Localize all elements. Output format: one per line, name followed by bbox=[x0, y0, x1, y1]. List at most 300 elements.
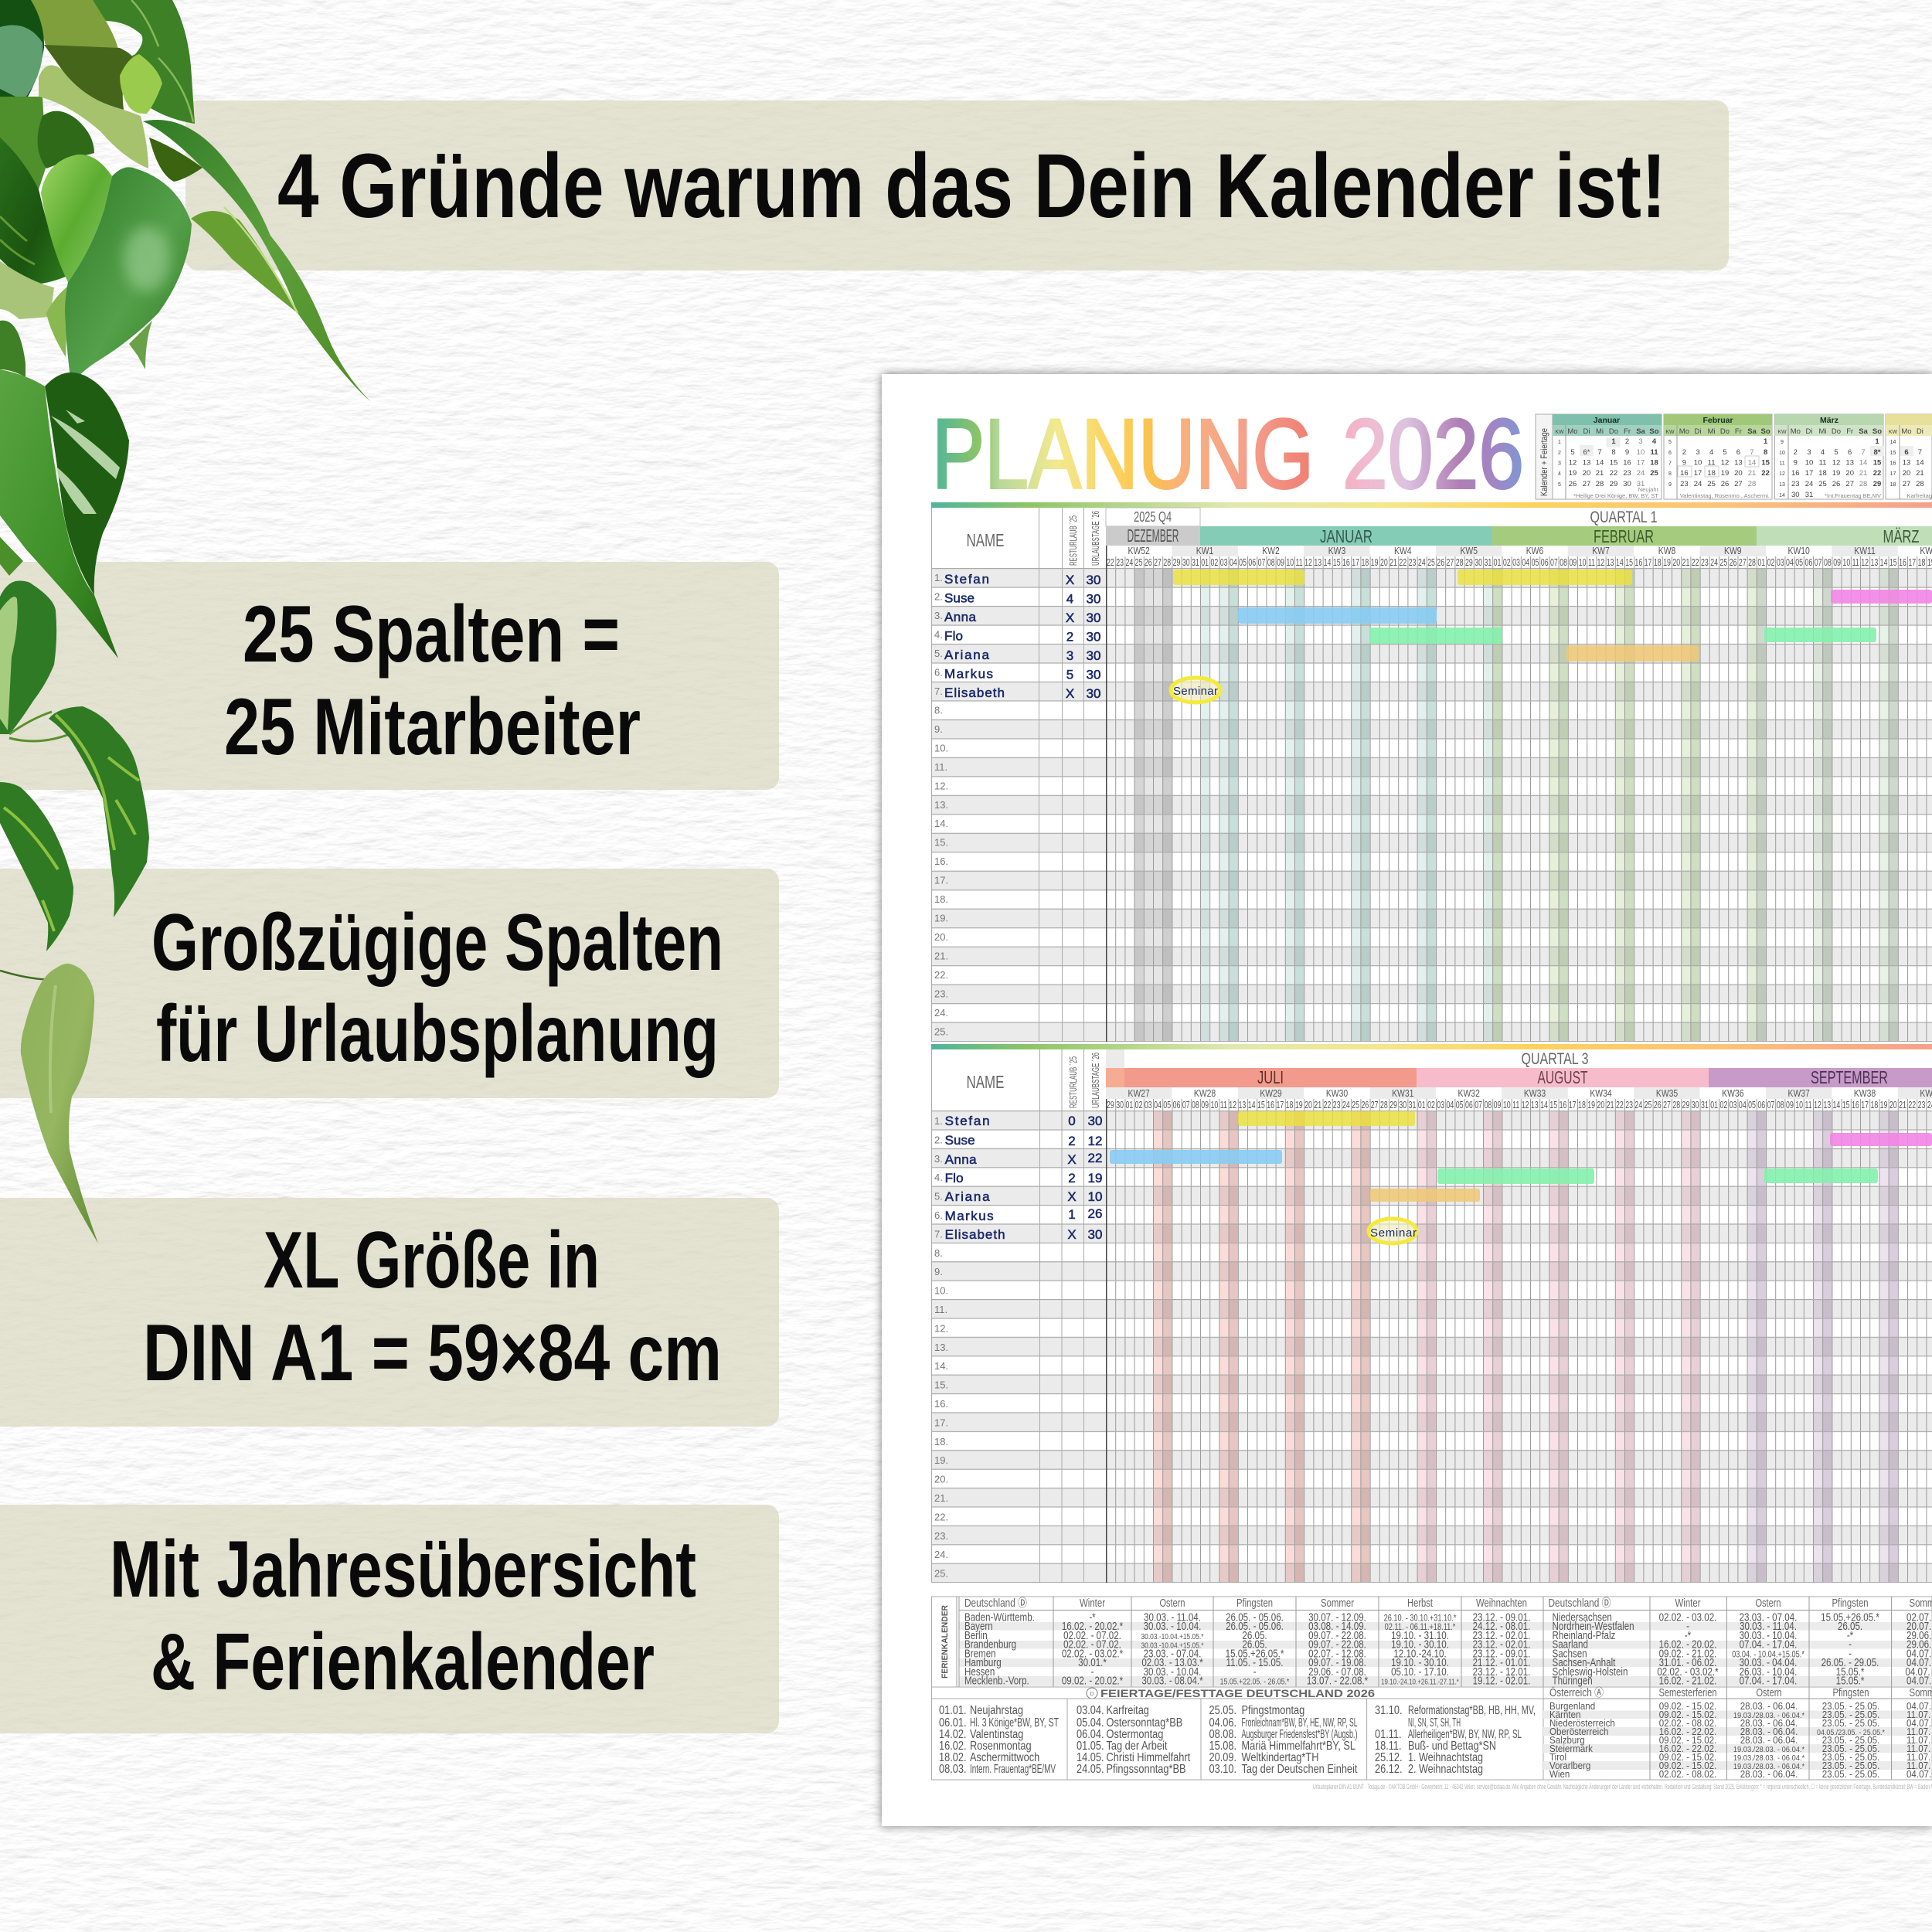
holidays column 1: Valentinstag bbox=[970, 1728, 1023, 1741]
pfingsten dates right: 15.05.+26.05.* bbox=[1821, 1611, 1879, 1624]
mini month: Februar: 26 bbox=[1721, 480, 1729, 488]
mini month: Februar: 25 bbox=[1707, 480, 1716, 488]
mini month: April: 20 bbox=[1903, 469, 1910, 478]
semester dates: 09.02. - 15.02. bbox=[1659, 1751, 1716, 1763]
header: calendar weeks Q1: KW4 bbox=[1394, 546, 1412, 556]
leave values Q3: 26 bbox=[1088, 1206, 1102, 1221]
column heads: Pfingsten bbox=[1833, 1686, 1869, 1699]
leaf: curved right bbox=[49, 706, 149, 917]
holidays column 4 bbox=[1375, 1704, 1536, 1776]
row numbers Q1: 18. bbox=[934, 893, 948, 905]
weihnachten dates: 19.12. - 02.01. bbox=[1473, 1674, 1530, 1687]
leaf: long narrow upper bbox=[143, 120, 371, 402]
pfingsten dates right: 15.05.* bbox=[1836, 1674, 1864, 1687]
leaf: dark green behind bbox=[0, 97, 46, 189]
mini month: März: 2 bbox=[1794, 448, 1798, 457]
header: calendar weeks Q1: KW1 bbox=[1196, 546, 1213, 556]
winter dates: 30.01.* bbox=[1078, 1656, 1107, 1668]
mini month: Januar: 2 bbox=[1558, 451, 1561, 456]
pfingsten dates: 23.05. - 25.05. bbox=[1822, 1743, 1879, 1754]
mini month: Februar: 18 bbox=[1707, 469, 1716, 478]
mini month: Januar: 23 bbox=[1623, 469, 1631, 478]
column heads: Semesterferien bbox=[1658, 1686, 1717, 1699]
mini month: Januar: 26 bbox=[1569, 480, 1577, 488]
holidays column 2: 01.05. bbox=[1077, 1740, 1104, 1753]
table frame and stripes bbox=[1543, 1687, 1932, 1780]
winter dates right: 31.01. - 06.02. bbox=[1659, 1656, 1716, 1668]
holidays column 1: 18.02. bbox=[939, 1751, 967, 1764]
pfingsten dates: 23.05. - 25.05. bbox=[1822, 1734, 1879, 1746]
sommer dates: 29.06. - 07.08. bbox=[1308, 1665, 1366, 1678]
row numbers Q3: 19. bbox=[934, 1454, 948, 1466]
leave values Q3: 19 bbox=[1088, 1171, 1102, 1185]
pfingsten dates: 26.05. bbox=[1242, 1629, 1267, 1641]
header: calendar weeks Q1: KW10 bbox=[1788, 546, 1810, 556]
mini month: März: 31 bbox=[1805, 491, 1813, 499]
mini month: März: 15 bbox=[1873, 459, 1882, 467]
mini month: März: 19 bbox=[1832, 469, 1840, 478]
sommer dates: 02.07. - 12.08. bbox=[1308, 1647, 1366, 1660]
mini month: März: 28 bbox=[1859, 480, 1867, 488]
mini month: Februar: 7 bbox=[1750, 448, 1754, 457]
row numbers Q1: 5. bbox=[934, 648, 943, 659]
pfingsten dates right: - bbox=[1849, 1638, 1852, 1651]
mini month: März: KW bbox=[1777, 430, 1787, 435]
heading: Feiertage Deutschland: D bbox=[1090, 1692, 1094, 1697]
pfingsten dates right: 15.05.* bbox=[1836, 1665, 1864, 1678]
ostern dates: 28.03. - 06.04. bbox=[1740, 1734, 1798, 1746]
mini month: März: 21 bbox=[1859, 469, 1867, 478]
leave values Q3: 2 bbox=[1068, 1134, 1076, 1148]
states: Oberösterreich bbox=[1549, 1726, 1609, 1737]
mini month: März: 29 bbox=[1873, 480, 1881, 488]
pfingsten dates: 26.05. - 05.06. bbox=[1226, 1611, 1284, 1624]
leave values Q3: X bbox=[1067, 1189, 1077, 1204]
header: quarter row Q3 bbox=[1106, 1049, 1589, 1068]
ostern dates right: 03.04. - 10.04.+15.05.* bbox=[1732, 1651, 1804, 1660]
leaf: top back dark-green bbox=[93, 0, 195, 124]
mini month: Februar: 9 bbox=[1682, 459, 1686, 467]
holidays column 1: Rosenmontag bbox=[970, 1740, 1032, 1753]
mini month: Februar bbox=[1664, 414, 1772, 499]
highlight: long leaf midrib bbox=[224, 207, 298, 313]
weihnachten dates: 24.12. - 08.01. bbox=[1473, 1620, 1530, 1632]
leaf: big heart main bbox=[65, 167, 192, 385]
leave values Q1: X bbox=[1066, 686, 1074, 701]
mini month: März: 22 bbox=[1873, 469, 1881, 478]
states: Vorarlberg bbox=[1549, 1760, 1590, 1771]
row numbers Q1: 16. bbox=[934, 855, 948, 867]
leaf: top-left dark corner bbox=[0, 0, 44, 104]
handwritten names Q3: Suse bbox=[945, 1133, 975, 1148]
poster heading: PLANUNG 2026: PLANUNG bbox=[932, 399, 1314, 510]
handwritten names Q1: Suse bbox=[944, 590, 975, 606]
handwritten names Q3: Elisabeth bbox=[945, 1227, 1005, 1242]
ostern dates: 28.03. - 06.04. bbox=[1740, 1726, 1798, 1737]
ostern dates: 30.03. - 10.04. bbox=[1144, 1665, 1201, 1678]
leave values Q3: 1 bbox=[1068, 1207, 1076, 1222]
weihnachten dates: 23.12. - 02.01. bbox=[1473, 1629, 1530, 1641]
states column right: Sachsen bbox=[1552, 1647, 1587, 1660]
holidays column 1: Hl. 3 Könige*BW, BY, ST bbox=[970, 1716, 1059, 1730]
pfingsten dates: 15.05.+22.05. - 26.05.* bbox=[1220, 1678, 1289, 1687]
header: month bands Q3: JULI bbox=[1257, 1067, 1284, 1087]
states column left: Bremen bbox=[964, 1647, 996, 1660]
states column right: Saarland bbox=[1552, 1638, 1588, 1651]
poster heading: PLANUNG 2026: 2026 bbox=[1342, 399, 1524, 510]
states column left: Brandenburg bbox=[964, 1638, 1016, 1651]
mini month: April: 14 bbox=[1916, 459, 1924, 467]
header: calendar weeks Q3: KW35 bbox=[1656, 1088, 1679, 1099]
mini month: April: 21 bbox=[1916, 469, 1924, 478]
header: month bands Q1 bbox=[1106, 526, 1932, 546]
mini month: Februar: 28 bbox=[1748, 480, 1756, 488]
mini month: April: 7 bbox=[1918, 448, 1922, 457]
sommer dates: 09.07. - 22.08. bbox=[1308, 1638, 1366, 1651]
row shading Q3 bbox=[931, 1111, 1932, 1582]
panel: feature box 2 bbox=[0, 869, 779, 1098]
column headers Q3: URLAUBSTAGE ´26 bbox=[1090, 1053, 1101, 1108]
leave values Q1: 4 bbox=[1066, 592, 1073, 606]
states: Salzburg bbox=[1549, 1734, 1585, 1746]
mini month: März: März bbox=[1820, 416, 1838, 425]
mini month: März: 9 bbox=[1781, 440, 1784, 445]
winter dates right: 16.02. - 21.02. bbox=[1659, 1674, 1716, 1687]
header: month bands Q1: JANUAR bbox=[1320, 526, 1372, 546]
vacation bar: Stefan first bbox=[1173, 570, 1304, 585]
vacation bar: Flo 1 bbox=[1437, 1168, 1594, 1184]
row numbers Q3: 21. bbox=[934, 1492, 948, 1504]
row numbers Q3: 23. bbox=[934, 1530, 948, 1542]
handwritten names Q1: Stefan bbox=[944, 572, 989, 587]
mini month: Februar: 2 bbox=[1682, 448, 1686, 457]
winter dates: 09.02. - 20.02.* bbox=[1062, 1674, 1123, 1687]
mini month: März: 13 bbox=[1845, 459, 1854, 467]
column heads: Pfingsten bbox=[1236, 1597, 1273, 1610]
states: Burgenland bbox=[1549, 1700, 1595, 1712]
mini month: Januar: 17 bbox=[1637, 459, 1645, 467]
leaf: top-left variegated bbox=[0, 25, 43, 100]
mini month: März: Mi bbox=[1818, 427, 1827, 436]
holidays column 4: 26.12. bbox=[1375, 1763, 1403, 1776]
herbst dates: 26.10. - 30.10.+31.10.* bbox=[1384, 1614, 1456, 1624]
mini month: März: 9 bbox=[1794, 459, 1798, 467]
header: calendar weeks Q1: KW52 bbox=[1128, 546, 1150, 556]
holidays column 3: Augsburger Friedensfest*BY (Augsb.) bbox=[1241, 1728, 1357, 1741]
mini month: April: Mo bbox=[1901, 427, 1912, 436]
leaf: second heart left half bbox=[0, 369, 118, 658]
pfingsten dates: 23.05. - 25.05. bbox=[1822, 1768, 1879, 1780]
leave values Q3: 10 bbox=[1088, 1189, 1102, 1204]
text block: Großzügige Spalten: für Urlaubsplanung bbox=[156, 989, 719, 1079]
mini month: Februar: Valentinstag, Rosenmo., Aschermi. bbox=[1680, 492, 1770, 499]
poster: calendar planner bbox=[882, 374, 1932, 1826]
winter dates right: 02.02. - 03.02. bbox=[1659, 1611, 1716, 1624]
mini month: März: Mo bbox=[1791, 427, 1801, 436]
holidays column 3: Mariä Himmelfahrt*BY, SL bbox=[1241, 1740, 1355, 1753]
leaf stems: centre cluster bbox=[9, 712, 70, 741]
row numbers Q1: 6. bbox=[934, 666, 943, 678]
mini month: Januar: 7 bbox=[1597, 448, 1602, 457]
header: calendar weeks Q3: KW31 bbox=[1392, 1088, 1413, 1099]
states column left: Bayern bbox=[964, 1620, 993, 1632]
column heads: Winter bbox=[1675, 1597, 1700, 1610]
pfingsten dates right: -* bbox=[1847, 1629, 1853, 1641]
mini month: Januar: Neujahr bbox=[1638, 486, 1659, 493]
holidays column 1: Intern. Frauentag*BE/MV bbox=[970, 1763, 1056, 1776]
poster sheet bbox=[882, 374, 1932, 1826]
column headers Q1: RESTURLAUB ´25 bbox=[1067, 515, 1079, 566]
winter dates right: 09.02. - 21.02. bbox=[1659, 1647, 1716, 1660]
column heads: Ostern bbox=[1159, 1597, 1185, 1610]
holidays column 3: 20.09. bbox=[1209, 1751, 1236, 1764]
mini month: Februar: So bbox=[1761, 427, 1770, 436]
mini month: Januar: 1 bbox=[1611, 437, 1616, 446]
winter dates right: 16.02. - 20.02. bbox=[1659, 1638, 1716, 1651]
leave values Q1: 30 bbox=[1087, 592, 1100, 606]
highlight: second heart white bands bbox=[51, 410, 120, 514]
row numbers Q1: 3. bbox=[934, 610, 943, 621]
row numbers Q3: 13. bbox=[934, 1342, 948, 1353]
mini month: April: 14 bbox=[1890, 440, 1896, 445]
holidays column 4: Buß- und Bettag*SN bbox=[1408, 1740, 1496, 1753]
header: calendar weeks Q3: KW28 bbox=[1194, 1088, 1216, 1099]
leave values Q1: 30 bbox=[1087, 629, 1100, 644]
row numbers Q1: 15. bbox=[934, 837, 948, 849]
row numbers Q1: 1. bbox=[934, 572, 943, 583]
ostern dates: 02.03. - 13.03.* bbox=[1141, 1656, 1203, 1668]
mini month: Februar: Do bbox=[1720, 427, 1730, 436]
holidays column 2 bbox=[1077, 1704, 1190, 1776]
mini month: Februar: Sa bbox=[1747, 427, 1757, 436]
ostern dates: 23.03. - 07.04. bbox=[1144, 1647, 1201, 1660]
row numbers Q1: 8. bbox=[934, 704, 943, 716]
leaf: pale lower bbox=[21, 964, 98, 1243]
panel: title banner bbox=[185, 100, 1729, 270]
handwritten names Q1: Anna bbox=[944, 610, 977, 624]
holidays column 2: 24.05. bbox=[1077, 1763, 1104, 1776]
mini month: Februar: Februar bbox=[1702, 416, 1733, 425]
mini month: Januar bbox=[1553, 414, 1662, 499]
mini month: Februar: 9 bbox=[1668, 482, 1672, 488]
grid lines Q1 bbox=[931, 508, 1932, 1042]
mini month: März: 30 bbox=[1791, 491, 1800, 499]
mini month: Januar: 13 bbox=[1583, 459, 1590, 467]
weihnachten dates: 23.12. - 09.01. bbox=[1473, 1647, 1530, 1660]
pfingsten dates: 26.05. bbox=[1242, 1638, 1267, 1651]
mini month: Januar: 5 bbox=[1558, 482, 1561, 488]
mini month: April: 13 bbox=[1903, 459, 1910, 467]
holidays column 3: Fronleichnam*BW, BY, HE, NW, RP, SL bbox=[1241, 1716, 1358, 1730]
text block: Großzügige Spalten bbox=[151, 898, 723, 1079]
column heads bbox=[1549, 1685, 1932, 1699]
leave values Q3: 30 bbox=[1088, 1114, 1102, 1128]
table: Ferienkalender Deutschland bbox=[932, 1597, 1932, 1687]
leave values Q3: X bbox=[1067, 1227, 1077, 1242]
vacation bar: Flo 2 bbox=[1764, 1168, 1878, 1183]
column heads: Herbst bbox=[1407, 1597, 1434, 1610]
handwritten names Q1: Markus bbox=[944, 666, 993, 681]
mini month: März: 13 bbox=[1779, 482, 1785, 488]
weihnachten dates: 23.12. - 12.01. bbox=[1473, 1665, 1530, 1678]
row numbers Q3: 18. bbox=[934, 1436, 948, 1447]
semester dates: 16.02. - 22.02. bbox=[1659, 1726, 1716, 1737]
mini month: Februar: 7 bbox=[1668, 461, 1672, 467]
states column right: Schleswig-Holstein bbox=[1552, 1665, 1628, 1678]
holidays column 1: 01.01. bbox=[939, 1704, 967, 1717]
seminar marker Q1 bbox=[1171, 678, 1220, 702]
leaf: small sliver bbox=[0, 537, 23, 576]
row numbers Q3: 17. bbox=[934, 1417, 948, 1428]
mini month: März: 17 bbox=[1805, 469, 1813, 478]
mini month: Februar: 16 bbox=[1680, 469, 1689, 478]
column headers Q1: URLAUBSTAGE ´26 bbox=[1090, 511, 1101, 566]
mini month: Februar: 6 bbox=[1668, 451, 1672, 456]
mini month: Januar: Mi bbox=[1596, 427, 1604, 436]
mini month: März: 14 bbox=[1859, 459, 1867, 467]
leaf: big heart pale base bbox=[46, 286, 68, 357]
mini month: Januar: *Heilige Drei Könige, BW, BY, ST bbox=[1573, 492, 1658, 499]
weihnachten dates: 21.12. - 01.01. bbox=[1473, 1656, 1530, 1668]
text block: Großzügige Spalten: Großzügige Spalten bbox=[151, 898, 723, 988]
mini month: Februar: 3 bbox=[1696, 448, 1700, 457]
winter dates: -* bbox=[1089, 1611, 1096, 1624]
mini month: Februar: 17 bbox=[1694, 469, 1702, 478]
mini month: März: Do bbox=[1832, 427, 1841, 436]
mini month: Januar: So bbox=[1649, 427, 1659, 436]
ostern dates right: 26.03. - 10.04. bbox=[1740, 1665, 1797, 1678]
leaf: pale under left bbox=[0, 261, 54, 319]
states column right: Niedersachsen bbox=[1552, 1611, 1612, 1624]
mini month: April: 16 bbox=[1890, 461, 1896, 467]
states: Wien bbox=[1549, 1768, 1570, 1780]
mini month: Januar: 1 bbox=[1558, 440, 1561, 445]
row numbers Q3: 1. bbox=[934, 1115, 943, 1127]
leave values Q1: 5 bbox=[1066, 667, 1073, 682]
mini month: Januar: Do bbox=[1609, 427, 1618, 436]
handwritten names Q3: Anna bbox=[945, 1152, 977, 1167]
header: month bands Q1: DEZEMBER bbox=[1127, 526, 1179, 546]
states column right: Rheinland-Pfalz bbox=[1552, 1629, 1615, 1641]
text block: XL Größe bbox=[143, 1216, 722, 1398]
mini month: Januar: 15 bbox=[1610, 459, 1617, 467]
mini month: Januar: 28 bbox=[1596, 480, 1604, 488]
mini month: April: 28 bbox=[1916, 480, 1924, 488]
handwritten names Q1: Ariana bbox=[944, 648, 990, 662]
leaf: pale yellow strip bbox=[39, 65, 148, 168]
header: quarter row Q3: QUARTAL 3 bbox=[1521, 1050, 1589, 1068]
highlight: big heart main bbox=[124, 226, 170, 291]
mini calendar side label: Kalender + Feiertage bbox=[1539, 428, 1549, 496]
states: Tirol bbox=[1549, 1751, 1566, 1763]
holidays column 2: Tag der Arbeit bbox=[1107, 1740, 1167, 1753]
holidays column 1: 08.03. bbox=[939, 1763, 967, 1776]
column heads: Deutschland Ⓓ bbox=[964, 1597, 1027, 1610]
column heads: Deutschland Ⓓ bbox=[1549, 1597, 1611, 1610]
states column left: Hessen bbox=[964, 1665, 995, 1678]
mini month: Januar: 30 bbox=[1623, 480, 1631, 488]
row numbers Q1: 19. bbox=[934, 913, 948, 924]
column heads bbox=[964, 1597, 1932, 1610]
pfingsten dates: 11.05. - 15.05. bbox=[1226, 1656, 1283, 1668]
text block: Jahresübersicht: & Ferienkalender bbox=[151, 1617, 655, 1707]
mini month: Januar: 31 bbox=[1637, 480, 1645, 488]
table: Feiertage list bbox=[932, 1699, 1543, 1780]
leave values Q3: 0 bbox=[1068, 1114, 1076, 1128]
vacation bar: Suse bbox=[1830, 1133, 1932, 1146]
row numbers Q1: 22. bbox=[934, 969, 948, 981]
header: calendar weeks Q3: KW34 bbox=[1590, 1088, 1612, 1099]
mini month: März: Fr bbox=[1846, 427, 1853, 436]
leave values Q3 bbox=[1067, 1114, 1102, 1242]
row numbers Q3: 8. bbox=[934, 1247, 943, 1259]
header: calendar weeks Q1: KW5 bbox=[1460, 546, 1478, 556]
row numbers Q3: 3. bbox=[934, 1153, 943, 1165]
holidays column 2: Pfingssonntag*BB bbox=[1107, 1763, 1186, 1776]
column headers Q3: RESTURLAUB ´25 bbox=[1067, 1056, 1079, 1108]
mini month: Februar: 8 bbox=[1668, 471, 1672, 477]
holidays column 1: Neujahrstag bbox=[970, 1704, 1023, 1717]
row numbers Q3: 12. bbox=[934, 1322, 948, 1334]
mini month: Januar: 3 bbox=[1558, 461, 1561, 467]
pfingsten dates: 23.05. - 25.05. bbox=[1822, 1717, 1879, 1729]
mini month: Februar: 4 bbox=[1709, 448, 1713, 457]
leave values Q1: X bbox=[1066, 573, 1074, 587]
column headers Q1 bbox=[966, 511, 1101, 566]
panel: feature box 3 bbox=[0, 1198, 779, 1427]
seminar marker Q3 bbox=[1369, 1219, 1417, 1243]
mini month: März: 18 bbox=[1818, 469, 1827, 478]
mini month: Januar: 3 bbox=[1638, 437, 1643, 446]
ostern dates: 28.03. - 06.04. bbox=[1740, 1768, 1798, 1780]
row numbers Q1: 7. bbox=[934, 685, 943, 697]
semester dates: 02.02. - 08.02. bbox=[1659, 1717, 1716, 1729]
holidays column 1: 14.02. bbox=[939, 1728, 967, 1741]
header: quarter row Q1: 2025 Q4 bbox=[1134, 509, 1172, 525]
vacation bar: Stefan bbox=[1238, 1111, 1415, 1126]
leaf: small bright bud bbox=[120, 54, 162, 114]
winter dates: 16.02. - 20.02.* bbox=[1062, 1620, 1123, 1632]
text block: Jahresübersicht: Mit Jahresübersicht bbox=[110, 1525, 696, 1614]
mini month: Januar: 20 bbox=[1583, 469, 1590, 478]
column heads: Sommer bbox=[1321, 1597, 1354, 1610]
ostern dates: 30.03. - 11.04. bbox=[1144, 1611, 1201, 1624]
mini month: Februar: KW bbox=[1665, 430, 1675, 435]
leaf: second heart dark half bbox=[45, 372, 129, 595]
winter dates: 02.02. - 07.02. bbox=[1063, 1638, 1121, 1651]
mini month: Februar: 27 bbox=[1734, 480, 1743, 488]
leaf: dark bud under long leaf bbox=[149, 138, 202, 182]
mini month: Januar: KW bbox=[1555, 430, 1564, 435]
holiday and weekend stripes Q1 bbox=[1134, 568, 1932, 1041]
ostern dates: 19.03./28.03. - 06.04.* bbox=[1733, 1763, 1804, 1771]
winter dates right: -* bbox=[1685, 1629, 1691, 1641]
mini month: Februar: 23 bbox=[1680, 480, 1689, 488]
holidays column 1 bbox=[939, 1704, 1059, 1776]
holidays column 2: 14.05. bbox=[1077, 1751, 1104, 1764]
mini month: Januar: 5 bbox=[1570, 448, 1575, 457]
mini month: Februar: Mi bbox=[1708, 427, 1716, 436]
mini month: März: So bbox=[1872, 427, 1882, 436]
sommer dates: 13.07. - 22.08.* bbox=[1307, 1674, 1368, 1687]
holidays column 3: 08.08. bbox=[1209, 1728, 1236, 1741]
row numbers Q1: 24. bbox=[934, 1007, 948, 1019]
mini month: April bbox=[1886, 414, 1932, 499]
mini month: Februar: Mo bbox=[1679, 427, 1689, 436]
leave values Q1: X bbox=[1066, 611, 1074, 625]
row numbers Q3: 15. bbox=[934, 1379, 948, 1391]
states: Kärnten bbox=[1549, 1709, 1581, 1720]
